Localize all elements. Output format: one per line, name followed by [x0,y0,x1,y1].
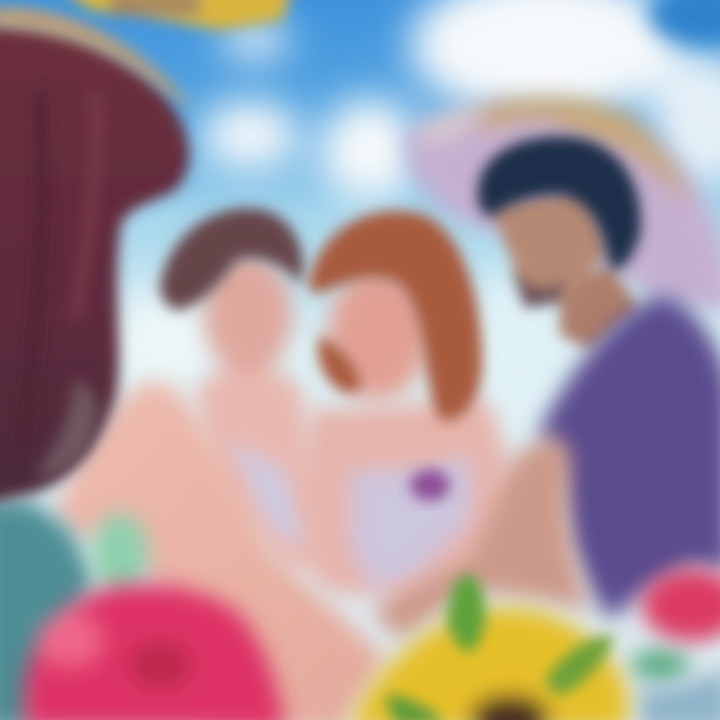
left woman: teal top [0,500,95,720]
green foliage [92,513,690,681]
brunette girl [195,255,335,570]
left woman: maroon hair [0,23,189,505]
dress purple bow [410,469,450,501]
clouds [115,0,720,430]
hair strands and highlight [0,7,195,476]
pink flower, right [640,569,720,720]
man: purple shirt [540,295,720,620]
red-haired girl: auburn hair [308,211,482,420]
man: neck and face [490,190,640,350]
sunflower leaves [385,574,615,720]
sunflower [350,608,629,720]
yellow umbrella edge [50,0,295,30]
red-haired girl: face [328,270,428,400]
brunette girl: hair [160,208,303,310]
straw hat on the right [404,97,720,310]
pink flower, left [24,584,285,720]
man: dark hair [478,136,641,269]
red-haired girl: body and dress [300,400,510,600]
man: arm reaching in [375,437,590,640]
dark sky corner [650,0,720,43]
left woman: arm and shoulder [55,382,385,720]
